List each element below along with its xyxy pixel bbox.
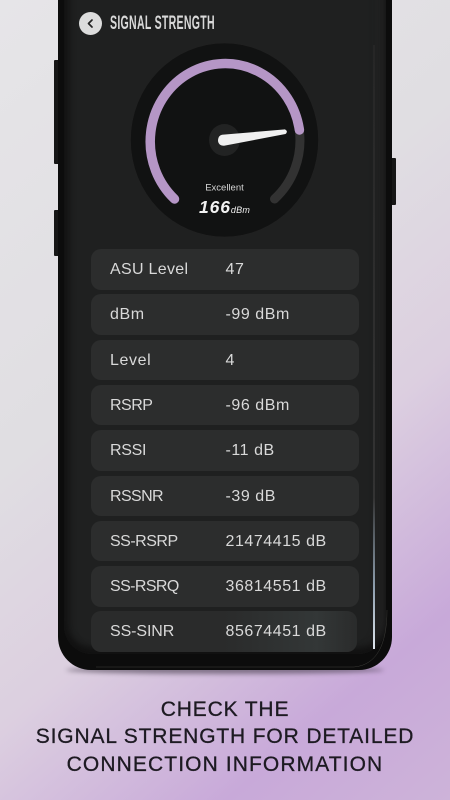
caption line 2: SIGNAL STRENGTH FOR DETAILED xyxy=(36,725,414,748)
row: RSSI xyxy=(90,430,358,471)
row: SS-SINR: SS-SINR xyxy=(110,623,174,640)
row: SS-SINR: 85674451 dB xyxy=(226,623,327,640)
needle xyxy=(218,129,287,146)
phone body xyxy=(58,0,392,670)
gauge value: 166dBm xyxy=(199,197,250,217)
gauge label: Excellent xyxy=(205,182,244,194)
row: SS-RSRP: 21474415 dB xyxy=(226,533,327,550)
screen edge highlight xyxy=(373,45,374,649)
caption xyxy=(36,698,414,776)
phone screen xyxy=(64,0,386,654)
row: ASU Level: 47 xyxy=(226,261,244,278)
row: dBm xyxy=(90,294,358,335)
row: RSSNR: -39 dB xyxy=(226,488,276,504)
row: RSSNR xyxy=(90,476,358,516)
heading: signal strength: SIGNAL STRENGTH xyxy=(110,13,215,34)
gauge xyxy=(131,44,318,236)
caption line 1: CHECK THE xyxy=(161,698,289,721)
row: SS-SINR xyxy=(90,611,356,652)
row: Level xyxy=(90,340,358,380)
row: RSRP: -96 dBm xyxy=(226,397,290,414)
phone shadow xyxy=(66,666,384,674)
caption line 3: CONNECTION INFORMATION xyxy=(67,753,383,776)
row: Level: 4 xyxy=(226,352,235,369)
row: RSRP xyxy=(90,385,358,425)
back button xyxy=(79,12,102,34)
gauge track xyxy=(274,131,300,199)
row: dBm: -99 dBm xyxy=(226,306,290,323)
needle hub xyxy=(209,124,240,156)
row: ASU Level: ASU Level xyxy=(110,261,188,278)
row: ASU Level xyxy=(90,249,358,290)
row: dBm: dBm xyxy=(110,306,145,323)
row: SS-RSRP xyxy=(90,521,358,561)
gauge disc xyxy=(130,43,318,237)
row: RSSNR: RSSNR xyxy=(110,488,163,504)
icon: back chevron xyxy=(88,19,93,28)
gauge value arc xyxy=(150,64,299,199)
phone rim highlight xyxy=(96,610,388,668)
row: SS-RSRQ: 36814551 dB xyxy=(226,578,327,595)
row: SS-RSRQ xyxy=(90,566,358,606)
row: SS-RSRP: SS-RSRP xyxy=(110,533,178,550)
row: RSSI: -11 dB xyxy=(226,442,275,459)
row: RSSI: RSSI xyxy=(110,442,146,459)
row: Level: Level xyxy=(110,352,151,369)
row: SS-RSRQ: SS-RSRQ xyxy=(110,578,179,595)
row: RSRP: RSRP xyxy=(110,397,152,414)
